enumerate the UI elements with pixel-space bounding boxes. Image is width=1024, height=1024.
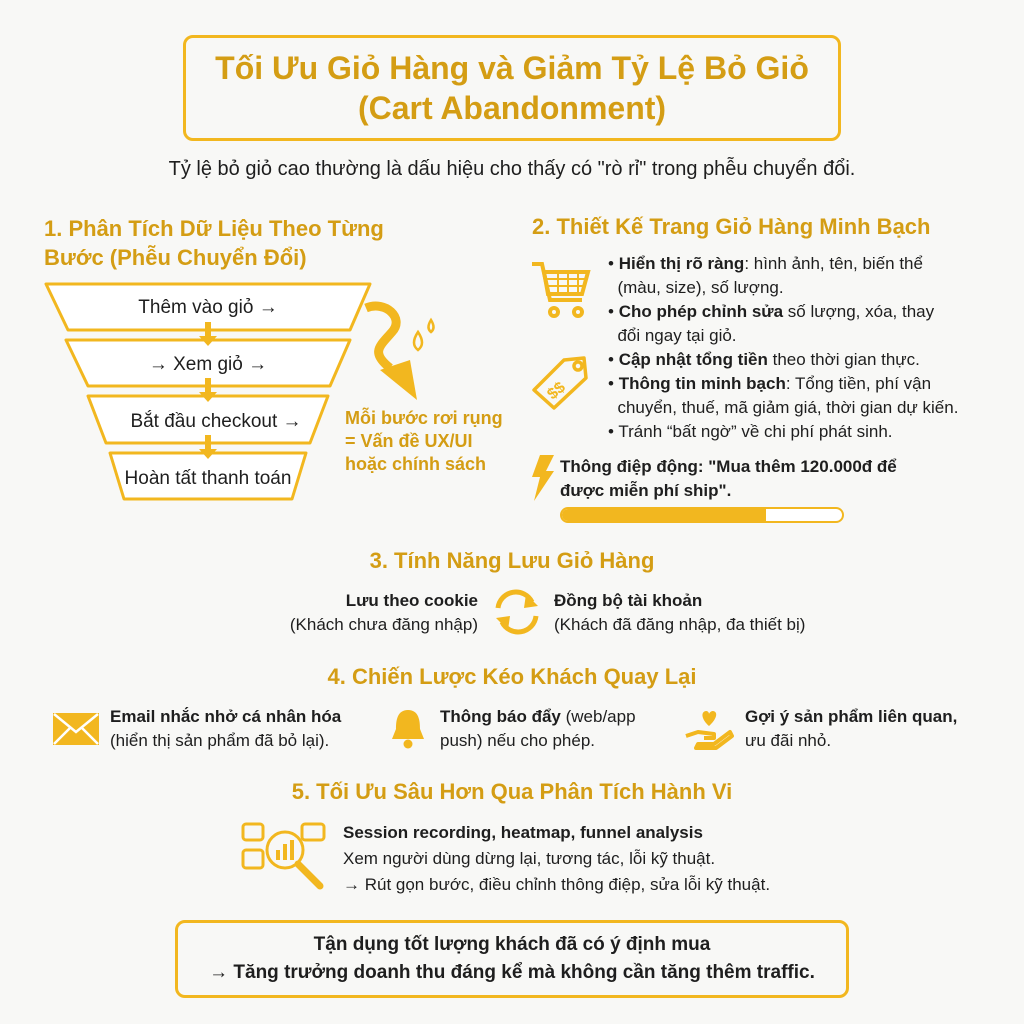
title box: (Cart Abandonment) — [358, 90, 666, 126]
bottom callout: Tận dụng tốt lượng khách đã có ý định mua — [314, 934, 710, 955]
heading 2: 2. Thiết Kế Trang Giỏ Hàng Minh Bạch — [532, 214, 930, 239]
icon: cart — [532, 262, 591, 318]
behavior text — [343, 823, 770, 894]
related products text — [745, 707, 957, 750]
icon: lightning — [532, 455, 554, 501]
cookie save: (Khách chưa đăng nhập) — [290, 615, 478, 634]
behavior text: → Rút gọn bước, điều chỉnh thông điệp, sửa lỗi kỹ thuật. — [343, 875, 770, 894]
leak note: hoặc chính sách — [345, 454, 486, 474]
behavior text: Session recording, heatmap, funnel analysis — [343, 823, 703, 842]
icon: sync — [496, 590, 538, 634]
icon: email — [53, 713, 99, 745]
bullets: đổi ngay tại giỏ. — [617, 326, 737, 345]
bullets: • Thông tin minh bạch: Tổng tiền, phí vận — [608, 374, 931, 393]
bullets: (màu, size), số lượng. — [617, 278, 784, 297]
progress bar — [560, 507, 844, 523]
title box: Tối Ưu Giỏ Hàng và Giảm Tỷ Lệ Bỏ Giỏ — [215, 50, 809, 86]
heading 1: Bước (Phễu Chuyển Đổi) — [44, 245, 307, 270]
funnel: Thêm vào giỏ → — [138, 297, 278, 318]
title box — [183, 35, 841, 141]
icon: price tag: $$ — [544, 379, 569, 403]
icon: price tag — [532, 356, 588, 410]
leak note: = Vấn đề UX/UI — [345, 431, 473, 451]
heading 3: 3. Tính Năng Lưu Giỏ Hàng — [370, 548, 654, 573]
email text — [110, 707, 342, 750]
leak note — [345, 408, 503, 474]
account sync: (Khách đã đăng nhập, đa thiết bị) — [554, 615, 805, 634]
behavior text: Xem người dùng dừng lại, tương tác, lỗi kỹ thuật. — [343, 849, 715, 868]
related products text: Gợi ý sản phẩm liên quan, — [745, 707, 957, 726]
funnel: → Xem giỏ → — [149, 354, 267, 375]
funnel: Hoàn tất thanh toán — [125, 468, 291, 489]
heading 1: 1. Phân Tích Dữ Liệu Theo Từng — [44, 216, 384, 241]
account sync: Đồng bộ tài khoản — [554, 591, 702, 610]
heading 4: 4. Chiến Lược Kéo Khách Quay Lại — [328, 664, 696, 689]
icon drops — [414, 320, 434, 350]
icon: analytics — [242, 822, 326, 890]
dynamic message: được miễn phí ship". — [560, 481, 731, 500]
push text: push) nếu cho phép. — [440, 731, 595, 750]
push text — [440, 707, 636, 750]
bullets: • Cập nhật tổng tiền theo thời gian thực. — [608, 350, 920, 369]
cookie save — [290, 591, 478, 634]
bottom callout — [175, 920, 849, 998]
funnel: Bắt đầu checkout → — [130, 410, 302, 432]
bullets: chuyển, thuế, mã giảm giá, thời gian dự kiến. — [617, 398, 958, 417]
bottom callout: → Tăng trưởng doanh thu đáng kể mà không cần tăng thêm traffic. — [209, 962, 815, 983]
email text: (hiển thị sản phẩm đã bỏ lại). — [110, 731, 329, 750]
dynamic message: Thông điệp động: "Mua thêm 120.000đ để — [560, 457, 897, 476]
push text: Thông báo đẩy (web/app — [440, 707, 636, 726]
heading 5: 5. Tối Ưu Sâu Hơn Qua Phân Tích Hành Vi — [292, 779, 732, 804]
heading 1 — [44, 216, 384, 270]
subtitle: Tỷ lệ bỏ giỏ cao thường là dấu hiệu cho thấy có "rò rỉ" trong phễu chuyển đổi. — [169, 158, 855, 180]
arrow: leak — [366, 306, 396, 368]
funnel — [44, 282, 435, 500]
bullets: • Hiển thị rõ ràng: hình ảnh, tên, biến thể — [608, 254, 923, 273]
dynamic message — [560, 457, 897, 500]
related products text: ưu đãi nhỏ. — [745, 731, 831, 750]
bullets — [608, 254, 958, 441]
bullets: • Tránh “bất ngờ” về chi phí phát sinh. — [608, 422, 893, 441]
icon: bell — [392, 710, 424, 748]
cookie save: Lưu theo cookie — [346, 591, 478, 610]
bullets: • Cho phép chỉnh sửa số lượng, xóa, thay — [608, 302, 934, 321]
leak note: Mỗi bước rơi rụng — [345, 408, 503, 428]
account sync — [554, 591, 805, 634]
email text: Email nhắc nhở cá nhân hóa — [110, 707, 341, 726]
icon: heart hand — [685, 711, 734, 750]
